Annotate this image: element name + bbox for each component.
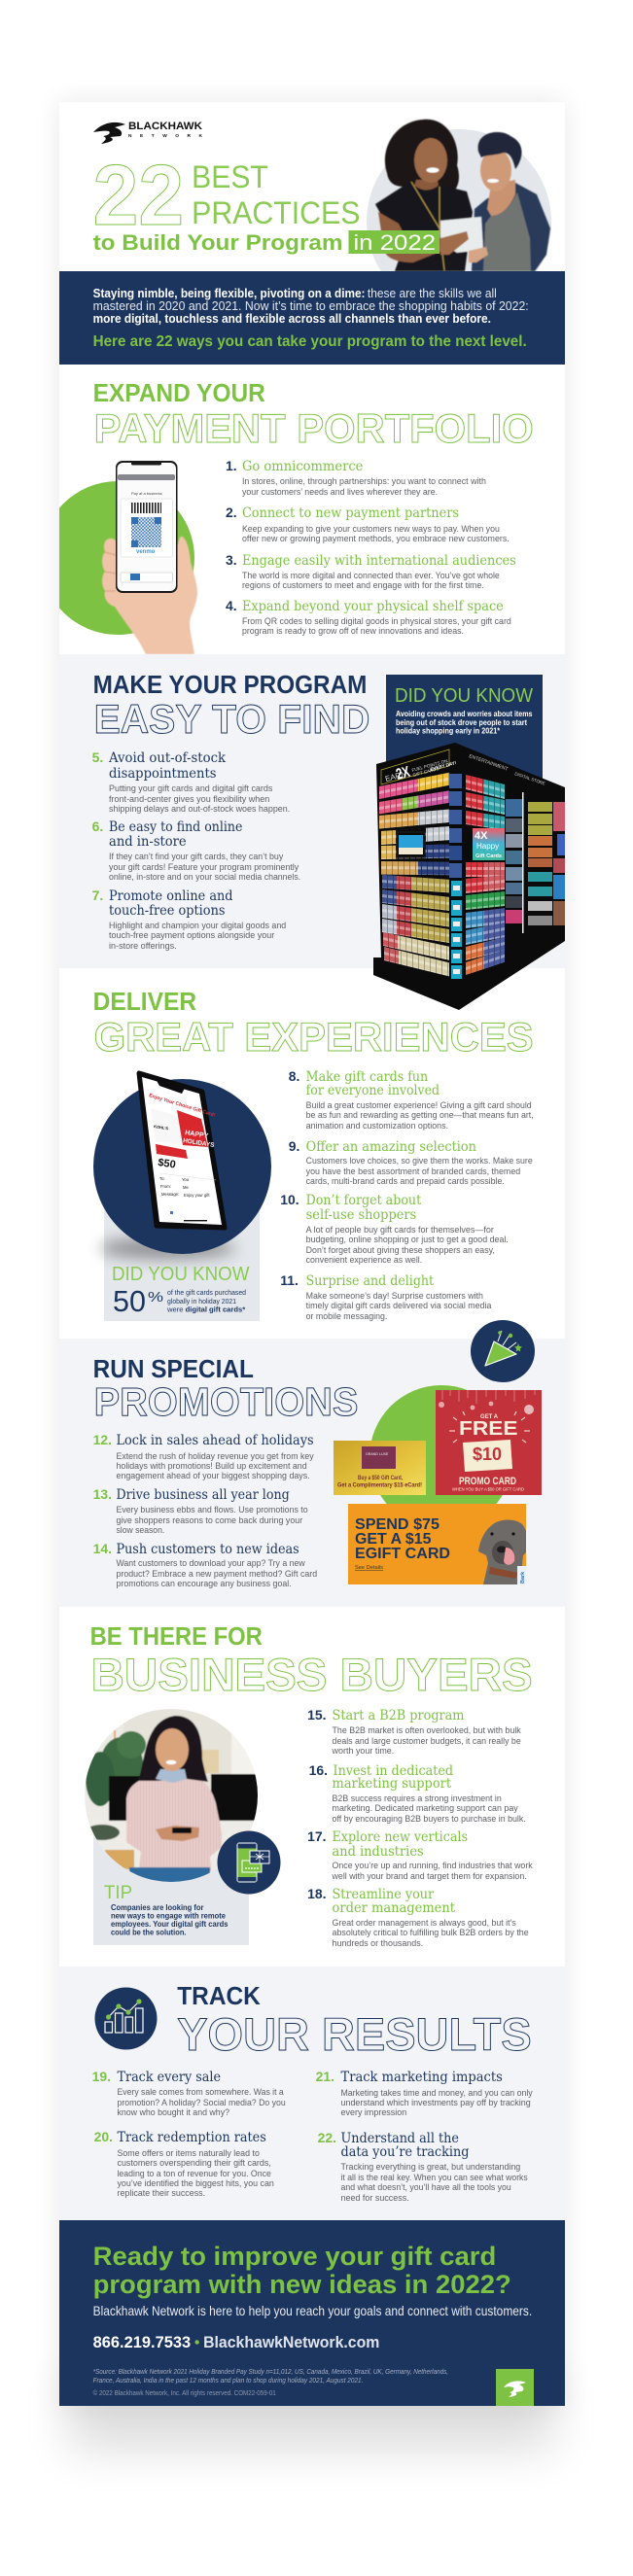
panel: track your results — [59, 1967, 565, 2220]
list: best practices 12 to 14: 12. — [93, 1432, 112, 1447]
rack header sign: FUEL POINTS ON — [411, 758, 448, 773]
list: best practices 8 to 11: timely digital gift cards delivered via social media — [306, 1301, 492, 1310]
heading: expand your payment portfolio: PAYMENT PORTFOLIO — [94, 405, 534, 451]
rack header sign: GIFT CARDS — [412, 766, 440, 778]
list: best practices 8 to 11: 8. — [289, 1068, 299, 1084]
list: best practices 8 to 11: 10. — [280, 1192, 299, 1207]
promo: red free promo card: WHEN YOU BUY A $50 OR GIFT CARD — [452, 1487, 524, 1491]
list: best practices 5 to 7: shipping delays and out-of-stock woes happen. — [109, 804, 290, 814]
list: best practices 15 to 18: hundreds or thousands. — [333, 1938, 423, 1948]
rack right screen — [473, 828, 505, 860]
promo: red free promo card: FREE — [459, 1417, 517, 1440]
promo: orange egift card ad with dog: SPEND $75 — [355, 1516, 440, 1533]
rack right screen: Happy — [476, 842, 499, 851]
list: best practices 8 to 11 — [280, 1068, 534, 1321]
list: best practices 19 to 22: know who bought it and why? — [117, 2107, 229, 2117]
list: best practices 5 to 7: 5. — [92, 749, 103, 765]
list: best practices 5 to 7: Avoid out-of-stock — [108, 750, 227, 766]
list: best practices 8 to 11: A lot of people buy gift cards for themselves—for — [306, 1225, 494, 1235]
panel: deliver great experiences — [59, 968, 565, 1339]
list: best practices 12 to 14: 14. — [93, 1541, 112, 1556]
icon: party popper — [471, 1320, 535, 1382]
heading: be there for business buyers: BE THERE FOR — [90, 1623, 263, 1651]
list: best practices 15 to 18: well with your brand and target them for expansion. — [332, 1871, 527, 1881]
list: best practices 19 to 22: Track marketing impacts — [341, 2070, 503, 2085]
callout: did you know — [386, 675, 543, 801]
list: best practices 15 to 18: 15. — [307, 1707, 327, 1723]
list: best practices 12 to 14: give shoppers reasons to come back during your — [116, 1515, 302, 1525]
list: best practices 12 to 14: Extend the rush of holiday revenue you get from key — [116, 1451, 314, 1461]
list: best practices 19 to 22: Understand all the — [341, 2131, 459, 2146]
list: best practices 5 to 7: online, in-store and on your social media channels. — [109, 872, 300, 882]
text: contact details: 866.219.7533 — [93, 2334, 191, 2351]
promo: orange egift card ad with dog: GET A $15 — [355, 1531, 432, 1548]
panel: run special promotions — [59, 1339, 565, 1607]
intro text: more digital, touchless and flexible across all channels than ever before. — [93, 312, 491, 326]
icon: phone with digital gift card: To: — [159, 1176, 165, 1181]
list: best practices 8 to 11: or mobile messaging. — [306, 1311, 387, 1321]
heading: deliver great experiences — [93, 989, 534, 1060]
list: best practices 8 to 11: Customers love choices, so give them the works. Make sure — [306, 1156, 533, 1166]
title: 22 best practices: in 2022 — [353, 230, 436, 255]
text: source and copyright: France, Australia, India in the past 12 months and plan to shop during holiday 2021, August 2021. — [93, 2377, 363, 2385]
list: best practices 5 to 7: If they can’t find your gift cards, they can’t buy — [109, 852, 284, 861]
list: best practices 1 to 4: your customers’ needs and lives wherever they are. — [242, 487, 438, 497]
promo: red free promo card: $10 — [473, 1445, 502, 1464]
list: best practices 8 to 11: Don’t forget about — [306, 1193, 422, 1208]
list: best practices 15 to 18: and industries — [333, 1844, 424, 1860]
list: best practices 15 to 18: The B2B market is often overlooked, but with bulk — [333, 1725, 521, 1735]
list: best practices 8 to 11: Make someone’s day! Surprise customers with — [306, 1291, 483, 1301]
promo: gold gift card offer: Get a Complimentary $15 eCard! — [337, 1481, 422, 1489]
icon: phone with digital gift card: HOLIDAYS — [183, 1137, 216, 1149]
list: best practices 1 to 4: Connect to new payment partners — [242, 505, 459, 521]
list: best practices 19 to 22: promotion? A holiday? Social media? Do you — [117, 2098, 286, 2107]
heading: make your program easy to find: EASY TO FIND — [94, 696, 369, 742]
heading: ready to improve: program with new ideas in 2022? — [93, 2270, 511, 2299]
icon: hand holding phone with QR code — [59, 461, 198, 654]
list: best practices 8 to 11: 9. — [289, 1138, 299, 1154]
list: best practices 8 to 11: Don’t forget about giving these shoppers an easy, — [306, 1245, 495, 1255]
icon: phone with digital gift card: You — [182, 1177, 190, 1182]
list: best practices 1 to 4 — [226, 458, 516, 636]
title: 22 best practices: PRACTICES — [192, 195, 360, 230]
list: best practices 15 to 18: deals and large customer budgets, it can really be — [333, 1736, 521, 1746]
promo: orange egift card ad with dog: Bark — [520, 1571, 526, 1584]
tip panel: Companies are looking for — [111, 1903, 204, 1912]
intro text: Staying nimble, being flexible, pivoting on a dime: — [93, 287, 365, 300]
list: best practices 5 to 7: 6. — [92, 818, 103, 834]
list: best practices 8 to 11: animation and customization options. — [306, 1121, 448, 1131]
heading: be there for business buyers — [90, 1623, 533, 1700]
list: best practices 5 to 7: your gift cards! Feature your program prominently — [109, 862, 299, 872]
list: best practices 12 to 14: Push customers to new ideas — [116, 1542, 299, 1557]
rack right face shelves — [466, 775, 505, 975]
list: best practices 19 to 22 — [92, 2069, 533, 2203]
photo: woman using smartphone — [85, 1709, 261, 1883]
list: best practices 1 to 4: From QR codes to selling digital goods in physical stores, your gift card — [242, 616, 511, 626]
heading: deliver great experiences: DELIVER — [93, 989, 196, 1016]
list: best practices 19 to 22: Track redemption rates — [117, 2130, 266, 2145]
list: best practices 1 to 4: program is ready to grow off of new innovations and ideas. — [242, 626, 464, 636]
list: best practices 12 to 14 — [93, 1432, 317, 1588]
list: best practices 19 to 22: it all is the real key. When you can see what works — [341, 2173, 528, 2182]
callout: did you know 50 percent: of the gift cards purchased — [167, 1288, 246, 1297]
heading: be there for business buyers: BUSINESS BUYERS — [91, 1650, 533, 1700]
icon: phone with digital gift card: Enjoy Your Choice Gift Card! — [148, 1093, 216, 1119]
panel: make your program easy to find — [59, 654, 565, 968]
logo: Blackhawk Network — [93, 121, 203, 144]
list: best practices 19 to 22: Some offers or items naturally lead to — [117, 2148, 260, 2158]
tip panel — [93, 1832, 249, 1945]
heading: make your program easy to find: MAKE YOUR PROGRAM — [93, 672, 367, 699]
icon: phone with digital gift card: Me — [183, 1185, 189, 1190]
heading: run special promotions — [93, 1356, 358, 1424]
photo: two women with a tablet — [367, 119, 551, 271]
list: best practices 15 to 18: Start a B2B program — [333, 1708, 465, 1723]
icon: phone with digital gift card: KOHL’S — [154, 1124, 169, 1131]
rack right screen: 4X — [475, 830, 488, 842]
list: best practices 15 to 18: absolutely critical to fulfilling bulk B2B orders by the — [333, 1928, 529, 1937]
list: best practices 8 to 11: self-use shoppers — [306, 1207, 416, 1223]
rack far side — [528, 802, 565, 925]
heading: deliver great experiences: GREAT EXPERIENCES — [94, 1014, 534, 1060]
rack inner aisle — [506, 792, 523, 933]
panel: intro band — [59, 271, 565, 365]
promo: orange egift card ad with dog — [348, 1504, 528, 1584]
list: best practices 8 to 11: 11. — [280, 1272, 299, 1288]
list: best practices 5 to 7: touch-free payment options alongside your — [109, 930, 274, 940]
rack header sign: 2X — [395, 764, 412, 783]
list: best practices 5 to 7 — [92, 749, 300, 951]
text: contact details: BlackhawkNetwork.com — [203, 2334, 379, 2351]
tip panel: TIP — [104, 1883, 132, 1903]
list: best practices 5 to 7: in-store offerings. — [109, 941, 177, 951]
list: best practices 19 to 22: data you’re tracking — [341, 2144, 470, 2160]
list: best practices 12 to 14: 13. — [93, 1486, 112, 1502]
heading: track your results — [177, 1983, 532, 2060]
list: best practices 15 to 18: Streamline your — [333, 1887, 435, 1902]
list: best practices 5 to 7: Be easy to find online — [109, 819, 242, 835]
list: best practices 15 to 18: worth your time. — [332, 1746, 394, 1756]
list: best practices 5 to 7: Putting your gift cards and digital gift cards — [109, 783, 273, 793]
panel: be there for business buyers — [59, 1607, 565, 1967]
promo: orange egift card ad with dog: EGIFT CARD — [355, 1546, 450, 1562]
list: best practices 15 to 18: Invest in dedicated — [334, 1763, 453, 1779]
rack header sign: ENTERTAINMENT — [468, 753, 509, 773]
list: best practices 19 to 22: 22. — [318, 2130, 336, 2145]
callout: did you know 50 percent: globally in holiday 2021 — [167, 1297, 236, 1305]
tip panel: could be the solution. — [111, 1929, 187, 1936]
promo: orange egift card ad with dog: See Details — [355, 1565, 383, 1571]
rack left screen — [397, 832, 425, 857]
rack header sign: EVERY DAY! — [430, 760, 457, 772]
list: best practices 8 to 11: cards, multi-brand cards and prepaid cards possible. — [306, 1176, 505, 1186]
promo: gold gift card offer — [334, 1441, 426, 1495]
list: best practices 12 to 14: holidays with promotions! Build up excitement and — [116, 1461, 307, 1471]
list: best practices 19 to 22: understand which investments pay off by tracking — [341, 2098, 531, 2107]
list: best practices 12 to 14: Every business ebbs and flows. Use promotions to — [116, 1505, 308, 1514]
promo: red free promo card: PROMO CARD — [459, 1476, 516, 1487]
callout: did you know 50 percent: DID YOU KNOW — [112, 1263, 250, 1285]
list: best practices 19 to 22: you’ve identified the biggest hits, you can — [117, 2178, 274, 2188]
list: best practices 15 to 18: 16. — [309, 1762, 328, 1778]
illustration: gift card display rack — [373, 743, 565, 1010]
promo: gold gift card offer: GRAND LUXE — [366, 1452, 389, 1456]
intro text: Here are 22 ways you can take your program to the next level. — [93, 333, 527, 350]
list: best practices 1 to 4: regions of customers to meet and engage with for the first time. — [242, 580, 484, 590]
tip panel: employees. Your digital gift cards — [111, 1920, 229, 1929]
icon: phone with digital gift card: HAPPY — [185, 1130, 209, 1140]
callout: did you know: being out of stock drove people to start — [396, 718, 527, 727]
callout: did you know 50 percent: were digital gift cards* — [166, 1305, 245, 1314]
rack left face shelves — [379, 773, 449, 976]
icon: green logo tile — [496, 2369, 534, 2406]
list: best practices 15 to 18 — [307, 1707, 533, 1948]
heading: ready to improve: Ready to improve your gift card — [93, 2242, 496, 2271]
rack header sign: EARN — [384, 769, 407, 783]
list: best practices 1 to 4: offer new or growing payment methods, you embrace new customers. — [242, 534, 510, 543]
list: best practices 8 to 11: budgeting, online shopping or just to get a good deal. — [306, 1235, 509, 1244]
rack header sign — [381, 749, 545, 786]
logo: Blackhawk Network: NETWORK — [128, 133, 203, 139]
callout: did you know: Avoiding crowds and worries about items — [396, 710, 533, 718]
list: best practices 19 to 22: 21. — [316, 2069, 334, 2084]
list: best practices 1 to 4: The world is more digital and connected than ever. You’ve got whole — [242, 571, 500, 580]
intro text: mastered in 2020 and 2021. Now it’s time to embrace the shopping habits of 2022: — [93, 299, 529, 313]
list: best practices 15 to 18: 18. — [307, 1886, 327, 1901]
text: source and copyright — [93, 2368, 448, 2397]
text: contact details — [93, 2304, 532, 2351]
list: best practices 12 to 14: Want customers to download your app? Try a new — [116, 1558, 305, 1568]
text: source and copyright: *Source: Blackhawk Network 2021 Holiday Branded Pay Study n=11,012, US, Canada, Mexico, Brazil, UK, Germany, Netherlands, — [93, 2368, 448, 2376]
list: best practices 15 to 18: marketing support — [333, 1776, 452, 1792]
callout: did you know: DID YOU KNOW — [395, 684, 534, 707]
title: 22 best practices: BEST — [192, 159, 268, 194]
list: best practices 19 to 22: customers overspending their gift cards, — [117, 2158, 271, 2168]
list: best practices 12 to 14: Lock in sales ahead of holidays — [116, 1433, 314, 1448]
heading: track your results: YOUR RESULTS — [177, 2009, 532, 2060]
tip panel: new ways to engage with remote — [111, 1911, 227, 1921]
callout: did you know: holiday shopping early in 2021* — [396, 727, 501, 735]
list: best practices 12 to 14: slow season. — [116, 1525, 164, 1535]
list: best practices 5 to 7: 7. — [92, 888, 103, 903]
promo: red free promo card — [436, 1390, 542, 1495]
list: best practices 12 to 14: promotions can encourage any business goal. — [116, 1579, 292, 1588]
list: best practices 19 to 22: Every sale comes from somewhere. Was it a — [117, 2087, 284, 2097]
list: best practices 8 to 11: Offer an amazing selection — [306, 1139, 476, 1155]
heading: ready to improve — [93, 2242, 511, 2299]
list: best practices 8 to 11: be as fun and rewarding as getting one—that means fun art, — [306, 1110, 534, 1120]
list: best practices 5 to 7: Promote online and — [109, 888, 233, 904]
promotions art — [334, 1385, 542, 1584]
heading: run special promotions: RUN SPECIAL — [93, 1356, 254, 1383]
list: best practices 5 to 7: disappointments — [109, 766, 217, 782]
list: best practices 12 to 14: product? Embrace a new payment method? Gift card — [116, 1569, 317, 1579]
icon: phone with digital gift card: Enjoy your gift — [184, 1193, 210, 1198]
panel: footer call to action — [59, 2220, 565, 2406]
list: best practices 5 to 7: touch-free options — [109, 903, 226, 919]
callout: did you know 50 percent: % — [148, 1289, 163, 1305]
heading: make your program easy to find — [93, 672, 369, 742]
list: best practices 19 to 22: need for success. — [341, 2193, 409, 2203]
promo: gold gift card offer: Buy a $50 Gift Card, — [358, 1476, 403, 1481]
list: best practices 19 to 22: Marketing takes time and money, and you can only — [341, 2088, 533, 2098]
text: source and copyright: © 2022 Blackhawk Network, Inc. All rights reserved. COM22-059-01 — [93, 2389, 276, 2397]
text: contact details: Blackhawk Network is here to help you reach your goals and connect with customers. — [93, 2304, 532, 2318]
list: best practices 8 to 11: convenient experience as well. — [306, 1255, 422, 1265]
title: 22 best practices — [93, 148, 440, 255]
list: best practices 5 to 7: Highlight and champion your digital goods and — [109, 921, 286, 930]
list: best practices 12 to 14: Drive business all year long — [116, 1487, 290, 1503]
rack right screen: Gift Cards — [475, 853, 502, 859]
heading: expand your payment portfolio — [93, 380, 534, 451]
intro text — [93, 287, 529, 350]
list: best practices 8 to 11: Surprise and delight — [306, 1273, 435, 1289]
icon: bar chart with trend line — [95, 1987, 158, 2049]
heading: expand your payment portfolio: EXPAND YOUR — [93, 380, 265, 407]
callout: did you know 50 percent — [93, 1079, 271, 1321]
panel: header hero — [59, 102, 565, 271]
callout: did you know 50 percent: 50 — [113, 1285, 146, 1318]
list: best practices 15 to 18: 17. — [307, 1828, 327, 1844]
list: best practices 15 to 18: order management — [333, 1900, 456, 1916]
list: best practices 19 to 22: 20. — [94, 2129, 113, 2144]
list: best practices 15 to 18: Explore new verticals — [333, 1829, 468, 1845]
card shadow — [59, 102, 565, 2450]
list: best practices 12 to 14: engagement ahead of your biggest shopping days. — [116, 1471, 310, 1480]
list: best practices 15 to 18: marketing. Dedicated marketing support can pay — [333, 1803, 518, 1813]
intro text: these are the skills we all — [368, 287, 497, 300]
list: best practices 19 to 22: Track every sale — [117, 2070, 221, 2085]
rack corner column — [449, 774, 462, 979]
heading: track your results: TRACK — [177, 1983, 261, 2010]
list: best practices 15 to 18: B2B success requires a strong investment in — [333, 1793, 502, 1803]
list: best practices 15 to 18: Great order management is always good, but it’s — [333, 1918, 516, 1928]
list: best practices 1 to 4: Go omnicommerce — [242, 459, 363, 474]
icon: hand holding phone with QR code: Pay at a business — [131, 491, 162, 496]
list: best practices 1 to 4: In stores, online, through partnerships: you want to connect with — [242, 476, 486, 486]
list: best practices 8 to 11: you have the best assortment of branded cards, themed — [306, 1166, 520, 1176]
rack header sign: DIGITAL STORE — [514, 771, 545, 786]
list: best practices 19 to 22: 19. — [92, 2069, 111, 2084]
icon: phone with gift card — [218, 1831, 280, 1894]
list: best practices 1 to 4: 4. — [226, 598, 237, 613]
icon: phone with digital gift card: From: — [160, 1184, 171, 1189]
list: best practices 8 to 11: Build a great customer experience! Giving a gift card should — [306, 1100, 532, 1110]
icon: dog licking nose — [478, 1520, 528, 1584]
list: best practices 1 to 4: Expand beyond your physical shelf space — [242, 599, 504, 614]
list: best practices 1 to 4: 1. — [226, 458, 237, 473]
icon: phone with digital gift card: $50 — [158, 1157, 176, 1171]
list: best practices 1 to 4: 2. — [226, 505, 237, 520]
icon: phone with digital gift card — [139, 1073, 225, 1228]
title: 22 best practices: 22 — [93, 148, 184, 243]
list: best practices 8 to 11: Make gift cards fun — [306, 1069, 428, 1085]
list: best practices 19 to 22: replicate their success. — [117, 2188, 205, 2198]
list: best practices 15 to 18: off by encouraging B2B buyers to purchase in bulk. — [333, 1814, 526, 1824]
icon: phone with digital gift card: Message: — [161, 1192, 179, 1197]
logo: Blackhawk Network: BLACKHAWK — [128, 121, 202, 132]
icon: hand holding phone with QR code: venmo — [136, 549, 156, 555]
list: best practices 5 to 7: and in-store — [109, 834, 187, 850]
promo: red free promo card: GET A — [480, 1413, 498, 1420]
panel: expand your payment portfolio — [41, 365, 565, 654]
list: best practices 1 to 4: 3. — [226, 552, 237, 568]
list: best practices 19 to 22: every impression — [341, 2107, 406, 2117]
title: 22 best practices: to Build Your Program — [93, 230, 343, 255]
list: best practices 15 to 18: Once you’re up and running, find industries that work — [333, 1861, 533, 1870]
list: best practices 1 to 4: Engage easily with international audiences — [242, 553, 516, 569]
list: best practices 19 to 22: Tracking everything is great, but understanding — [341, 2162, 520, 2172]
list: best practices 5 to 7: front-and-center gives you flexibility when — [109, 794, 269, 804]
list: best practices 1 to 4: Keep expanding to give your customers new ways to pay. When you — [242, 524, 500, 534]
list: best practices 19 to 22: leading to a ton of revenue for you. Once — [117, 2169, 271, 2178]
list: best practices 19 to 22: and what doesn’t, you’ll have all the tools you — [341, 2182, 511, 2192]
heading: run special promotions: PROMOTIONS — [94, 1379, 358, 1424]
list: best practices 8 to 11: for everyone involved — [306, 1083, 440, 1098]
